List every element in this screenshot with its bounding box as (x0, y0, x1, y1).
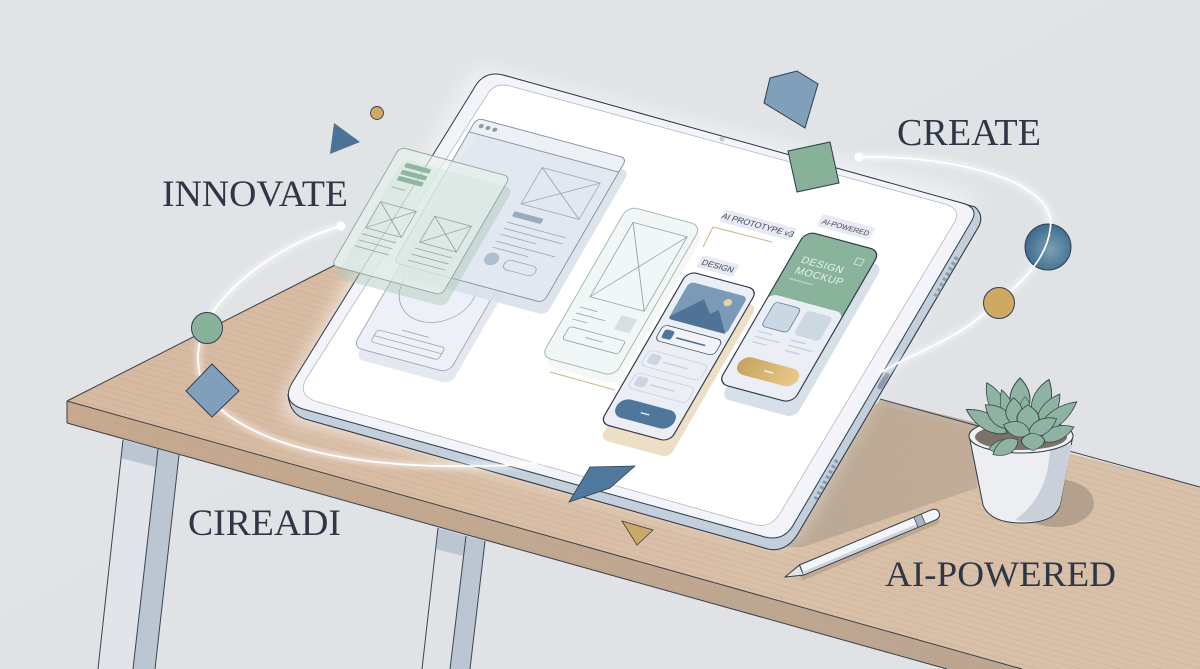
blue triangle (330, 123, 360, 154)
wireframe: tall card (348, 148, 571, 384)
pot (969, 419, 1073, 523)
label: AI prototype: AI PROTOTYPE v3 (720, 211, 796, 239)
phone mockup: design mockup screen (721, 232, 880, 416)
orbit line right (859, 157, 1051, 373)
heading: CREATE: CREATE (897, 112, 1041, 154)
speaker grille bottom (814, 460, 837, 502)
tablet glow on desk (277, 272, 648, 516)
label: design (696, 255, 740, 277)
gold triangle (622, 521, 653, 545)
tablet device (288, 74, 981, 550)
green square (788, 142, 839, 192)
heading: CIREADI: CIREADI (188, 503, 341, 544)
orbit node left (336, 222, 346, 230)
succulent leaves (962, 377, 1081, 461)
blue button (611, 397, 680, 431)
connector lines (550, 227, 772, 390)
label: AI-powered: AI-POWERED (820, 217, 872, 238)
desk legs (98, 440, 485, 669)
orbit glow left (198, 226, 545, 466)
image tiles (761, 302, 833, 341)
label: AI-powered (816, 214, 876, 240)
side button (880, 375, 887, 387)
small gold dot (370, 106, 384, 120)
blue diamond (186, 364, 239, 417)
glass green wireframe card (326, 147, 519, 307)
green orb (192, 312, 222, 344)
tablet screen (303, 85, 957, 525)
potted succulent (962, 377, 1094, 527)
blue orb (1025, 224, 1071, 270)
heading: AI-POWERED: AI-POWERED (885, 554, 1116, 594)
label: design: DESIGN (700, 257, 736, 275)
green header (768, 234, 876, 318)
tablet glow on wall (300, 78, 965, 532)
gold button (733, 355, 803, 388)
heading: INNOVATE: INNOVATE (162, 174, 348, 215)
blue pentagon (764, 71, 818, 128)
tablet side edge (288, 75, 981, 550)
heading text line 2: MOCKUP (793, 266, 846, 288)
pot shadow (1018, 479, 1094, 527)
QR icon (854, 258, 864, 266)
phone mockup: list screen (592, 271, 765, 458)
camera (720, 136, 724, 142)
wireframe: browser window (388, 118, 635, 315)
orbit node right (854, 152, 864, 162)
blue shard (569, 466, 635, 502)
stylus pencil (783, 507, 943, 586)
list rows (627, 324, 723, 403)
speaker grille top (935, 257, 957, 297)
gold orb (984, 288, 1014, 318)
wooden desk (67, 265, 1200, 669)
image placeholder (668, 281, 748, 334)
wireframe: phone outline (537, 206, 708, 385)
orbit line left (198, 226, 545, 466)
tablet bezel (288, 74, 974, 538)
heading text: DESIGN (799, 255, 846, 276)
orbit glow right (859, 157, 1051, 373)
